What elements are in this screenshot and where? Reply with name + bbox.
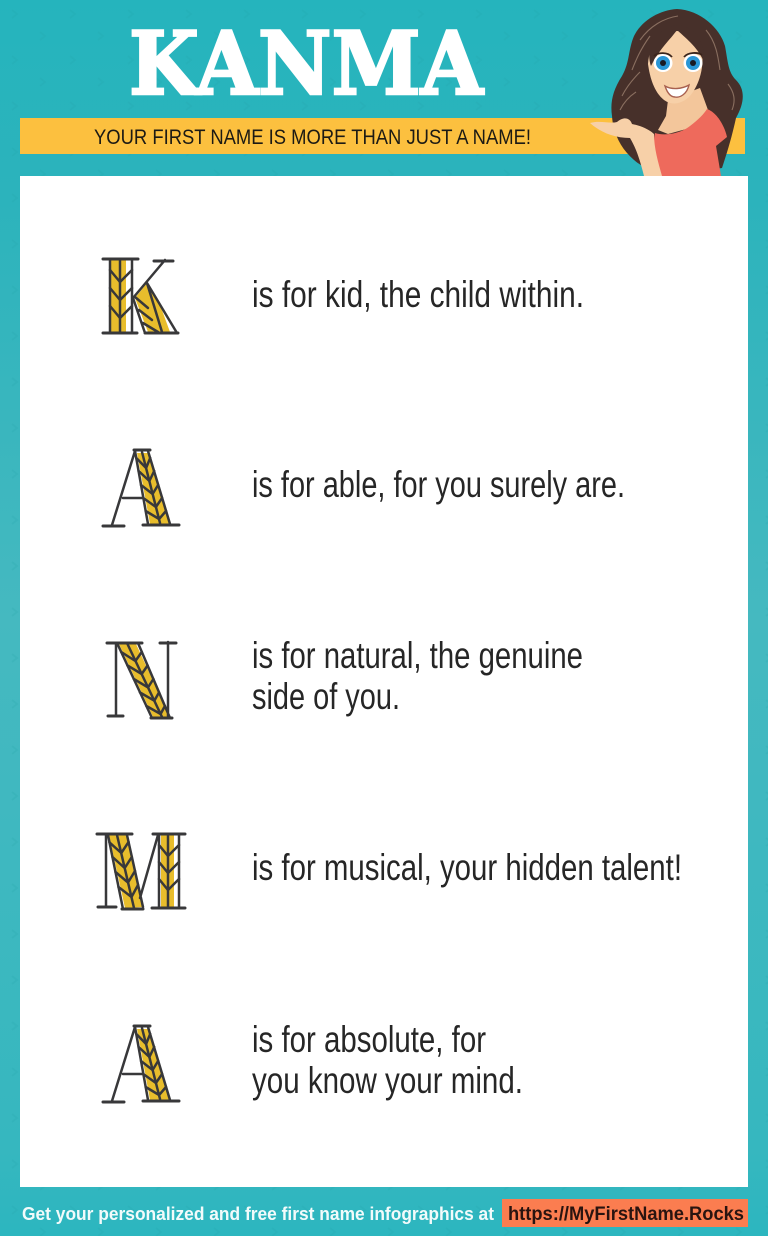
footer text: Get your personalized and free first name infographics at [22, 1203, 494, 1224]
icon: letter K [103, 259, 178, 333]
footer link: https://MyFirstName.Rocks [508, 1204, 744, 1225]
text: A line: is for able, for you surely are. [252, 464, 625, 505]
icon: letter A second [103, 1026, 179, 1102]
panel: letters [20, 176, 748, 1187]
banner: YOUR FIRST NAME IS MORE THAN JUST A NAME! [94, 126, 531, 149]
text: K line: is for kid, the child within. [252, 274, 584, 315]
banner [20, 118, 745, 154]
text: second A line [252, 1019, 523, 1101]
text: second A line: you know your mind. [252, 1060, 523, 1101]
text: N line [252, 635, 583, 717]
text: N line: is for natural, the genuine [252, 635, 583, 676]
icon: letter N [107, 642, 176, 718]
title: KANMA [129, 12, 484, 115]
text: N line: side of you. [252, 676, 400, 717]
text: second A line: is for absolute, for [252, 1019, 486, 1060]
icon: cartoon woman [590, 9, 743, 176]
icon: letter M [97, 834, 185, 909]
icon: letter A [103, 450, 179, 526]
